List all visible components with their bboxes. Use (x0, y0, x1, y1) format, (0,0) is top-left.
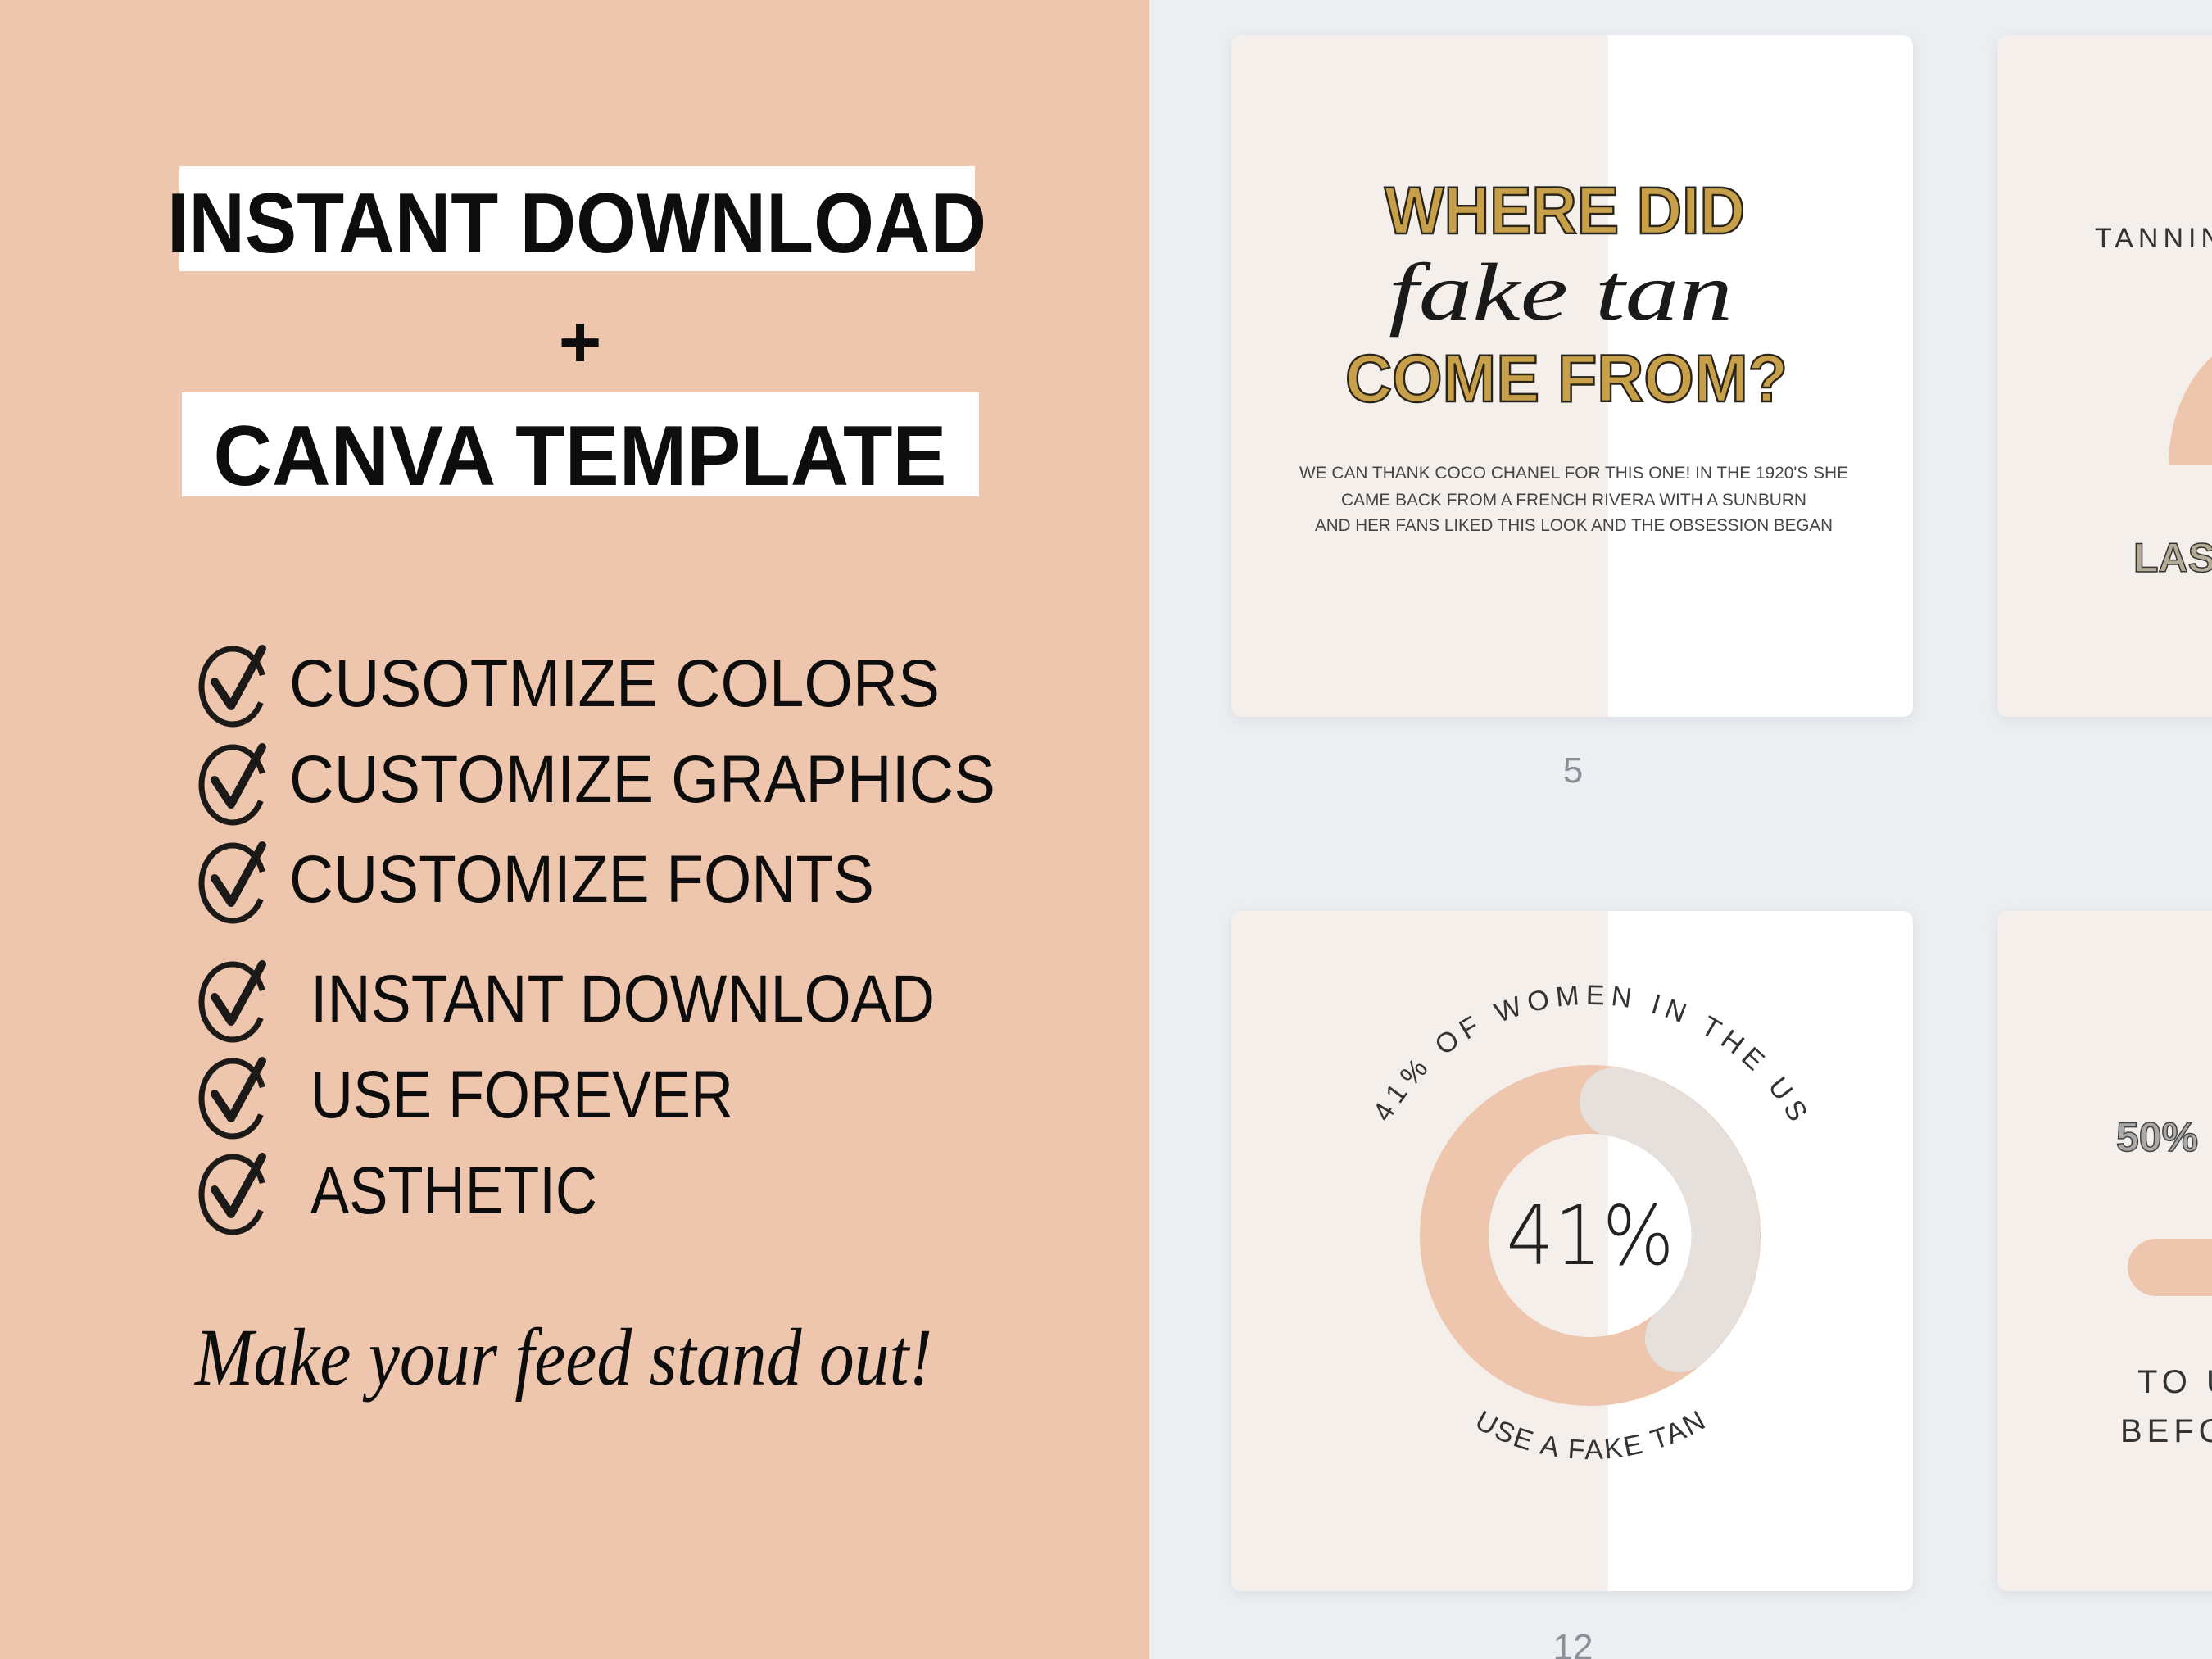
card: 50% partial (1997, 911, 2212, 1591)
script: fake tan: fake tan (1389, 247, 1733, 338)
item: use forever (202, 1058, 733, 1136)
donut: 41% (1506, 1188, 1675, 1284)
curved label bottom: USE A FAKE TAN (1477, 1411, 1706, 1460)
item: use forever: USE FOREVER (310, 1058, 733, 1132)
body text: AND HER FANS LIKED THIS LOOK AND THE OBSESSION BEGAN (1315, 516, 1833, 535)
heading: come from: COME FROM? (1345, 342, 1788, 416)
item: asthetic: ASTHETIC (310, 1154, 597, 1228)
card 12: donut chart (1230, 911, 1915, 1596)
card 5: where did fake tan come from (1231, 35, 1913, 717)
plus sign: + (559, 301, 601, 383)
item: asthetic (202, 1154, 597, 1232)
tagline script: Make your feed stand out! (193, 1312, 932, 1403)
item: customize graphics: CUSTOMIZE GRAPHICS (289, 742, 995, 817)
donut (1454, 1099, 1726, 1371)
title: canva template: CANVA TEMPLATE (213, 409, 947, 504)
card: tanning partial (1997, 35, 2212, 717)
item: customize colors: CUSOTMIZE COLORS (289, 646, 940, 721)
heading: where did: WHERE DID (1385, 174, 1745, 248)
title: instant download: INSTANT DOWNLOAD (167, 176, 986, 271)
curved label top: 41% OF WOMEN IN THE US (1376, 985, 1806, 1121)
item: instant download: INSTANT DOWNLOAD (310, 962, 935, 1036)
card: 50% partial: 50% (2116, 1114, 2198, 1160)
checklist (202, 646, 995, 1232)
panel: left promo (0, 0, 1149, 1659)
body text: WE CAN THANK COCO CHANEL FOR THIS ONE! IN THE 1920'S SHE (1299, 464, 1848, 483)
page number 5: 5 (1563, 750, 1583, 791)
item: customize fonts: CUSTOMIZE FONTS (289, 842, 874, 917)
body text (1299, 464, 1848, 535)
body text: CAME BACK FROM A FRENCH RIVERA WITH A SUNBURN (1341, 491, 1806, 510)
